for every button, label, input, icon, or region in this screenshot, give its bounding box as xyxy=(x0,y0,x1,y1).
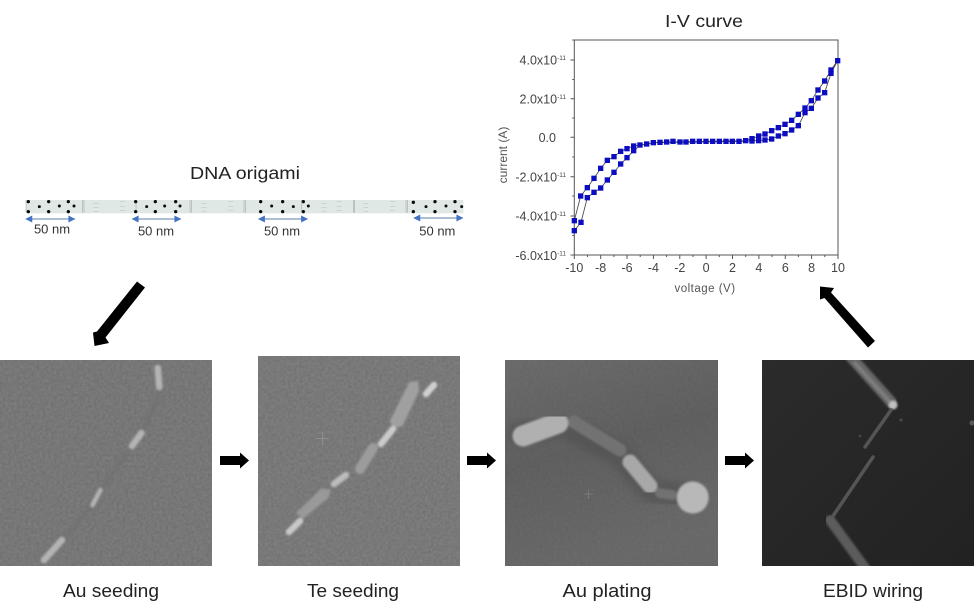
x-axis labels: 2 xyxy=(729,261,736,275)
crosshair mark xyxy=(584,490,593,499)
x-axis labels: -6 xyxy=(621,261,633,275)
connecting lines xyxy=(574,61,838,231)
x-axis labels: 6 xyxy=(782,261,789,275)
axis ticks xyxy=(570,40,838,259)
y-axis labels xyxy=(515,54,566,263)
50 nm scale arrows xyxy=(26,216,463,221)
heading: I-V curve: I-V curve xyxy=(665,11,743,31)
50 nm labels: 50 nm xyxy=(34,221,70,236)
x-axis labels xyxy=(565,261,845,275)
darker Te segments xyxy=(574,422,672,495)
y-axis labels: -11 xyxy=(557,250,566,258)
y-axis labels: -6.0x10 xyxy=(515,249,557,263)
x-axis labels: 8 xyxy=(808,261,815,275)
data series xyxy=(572,58,840,233)
arrow: Au seeding to Te seeding xyxy=(220,452,249,468)
panel: Te seeding SEM image xyxy=(258,356,460,566)
50 nm labels xyxy=(34,221,455,238)
upper electrode xyxy=(850,356,892,403)
y-axis labels: -11 xyxy=(557,211,566,218)
y-axis labels: 4.0x10 xyxy=(520,54,557,68)
panel: Au plating SEM image xyxy=(505,360,718,566)
x-axis labels: -4 xyxy=(648,261,659,275)
x-axis title: voltage (V) xyxy=(674,283,736,295)
lower electrode xyxy=(830,520,868,572)
seed dots xyxy=(27,200,463,213)
arrow: EBID wiring to I-V curve xyxy=(820,286,875,348)
debris specks xyxy=(900,418,902,422)
diagram: DNA origami strip xyxy=(26,200,463,238)
arrow: DNA origami to Au seeding xyxy=(93,282,145,346)
y-axis labels: -11 xyxy=(557,172,566,179)
x-axis labels: 0 xyxy=(703,261,710,275)
arrow: Te seeding to Au plating xyxy=(467,452,496,468)
y-axis title: current (A) xyxy=(496,127,510,183)
gold rods xyxy=(44,368,159,560)
x-axis labels: -10 xyxy=(565,261,583,275)
gold sphere xyxy=(677,482,709,514)
y-axis labels: -4.0x10 xyxy=(515,210,557,224)
50 nm labels: 50 nm xyxy=(419,223,455,238)
EBID nanowires xyxy=(833,410,891,516)
label: EBID wiring: EBID wiring xyxy=(823,581,923,601)
crosshair mark xyxy=(316,432,329,445)
plot frame xyxy=(574,40,838,255)
chart: I-V curve xyxy=(496,40,845,295)
50 nm labels: 50 nm xyxy=(264,223,300,238)
plated chain halo xyxy=(520,425,690,497)
label: Au plating: Au plating xyxy=(562,581,652,601)
ribbon staple lines xyxy=(26,200,407,213)
x-axis labels: -2 xyxy=(674,261,685,275)
label: Au seeding: Au seeding xyxy=(63,581,159,601)
x-axis labels: 10 xyxy=(831,261,845,275)
50 nm labels: 50 nm xyxy=(138,223,174,238)
y-axis labels: 2.0x10 xyxy=(520,92,557,106)
y-axis labels: 0.0 xyxy=(539,131,556,145)
plated gold segments xyxy=(523,423,650,486)
panel: Au seeding SEM image xyxy=(0,360,212,566)
tellurium-coated segments xyxy=(289,382,434,532)
label: Te seeding: Te seeding xyxy=(307,581,399,601)
heading: DNA origami: DNA origami xyxy=(190,163,300,183)
y-axis labels: -11 xyxy=(557,94,566,101)
faint DNA track xyxy=(115,470,116,471)
y-axis labels: -11 xyxy=(557,55,566,62)
measured points xyxy=(572,58,840,233)
x-axis labels: -8 xyxy=(595,261,606,275)
arrow: Au plating to EBID wiring xyxy=(725,452,754,468)
panel: EBID wiring SEM image xyxy=(762,356,974,572)
x-axis labels: 4 xyxy=(755,261,762,275)
y-axis labels: -2.0x10 xyxy=(515,170,557,184)
origami ribbon xyxy=(26,200,463,213)
